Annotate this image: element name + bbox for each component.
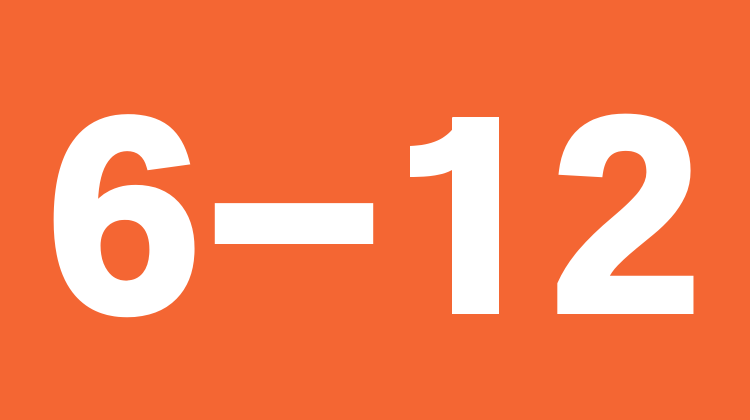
panel: orange background with grade range: [54, 114, 694, 318]
digit 6: 6: [47, 60, 201, 370]
digit 1: [410, 117, 499, 314]
digit 1: 1: [393, 60, 547, 370]
heading: 6–12: [54, 114, 694, 318]
digit 2: 2: [551, 60, 701, 369]
